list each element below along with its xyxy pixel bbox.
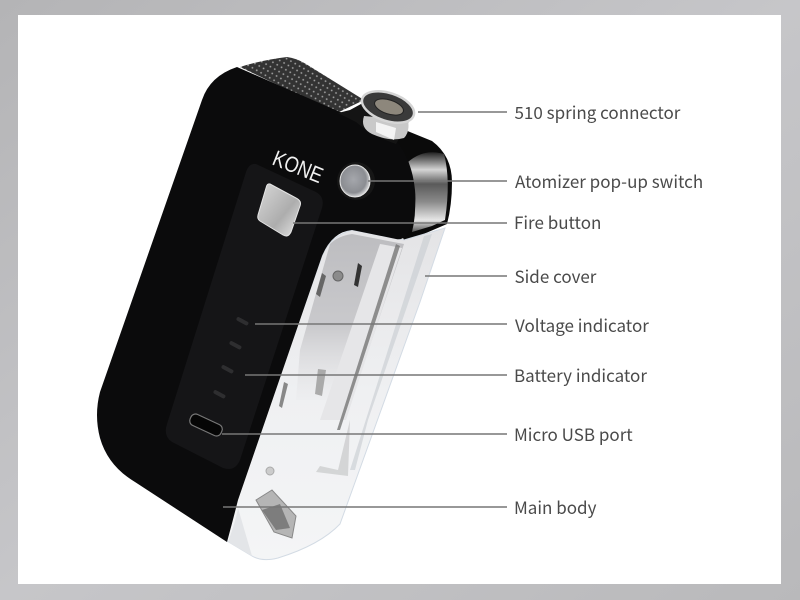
top mesh strip <box>240 57 364 113</box>
KONE logo: KONE <box>269 145 327 188</box>
black main body <box>97 67 415 542</box>
510 spring connector <box>338 85 418 144</box>
label: Micro USB port: Micro USB port <box>514 421 633 446</box>
transparent side cover <box>227 228 445 560</box>
label: Atomizer pop-up switch: Atomizer pop-up switch <box>515 168 703 193</box>
fire button <box>258 184 300 236</box>
indicator lights <box>213 316 249 399</box>
device: KONE box mod <box>97 57 452 560</box>
label: Voltage indicator: Voltage indicator <box>515 312 649 337</box>
label: Fire button: Fire button <box>514 209 601 234</box>
label: Side cover: Side cover <box>514 263 597 288</box>
chrome side band <box>340 112 452 242</box>
label: 510 spring connector: 510 spring connector <box>514 99 681 124</box>
front recessed panel <box>166 164 323 469</box>
label: Main body: Main body <box>514 494 597 519</box>
label: Battery indicator: Battery indicator <box>514 362 647 387</box>
atomizer pop-up switch <box>337 162 375 200</box>
micro USB port <box>188 412 224 438</box>
side cover inner detail <box>228 234 432 556</box>
leader lines <box>222 112 507 507</box>
